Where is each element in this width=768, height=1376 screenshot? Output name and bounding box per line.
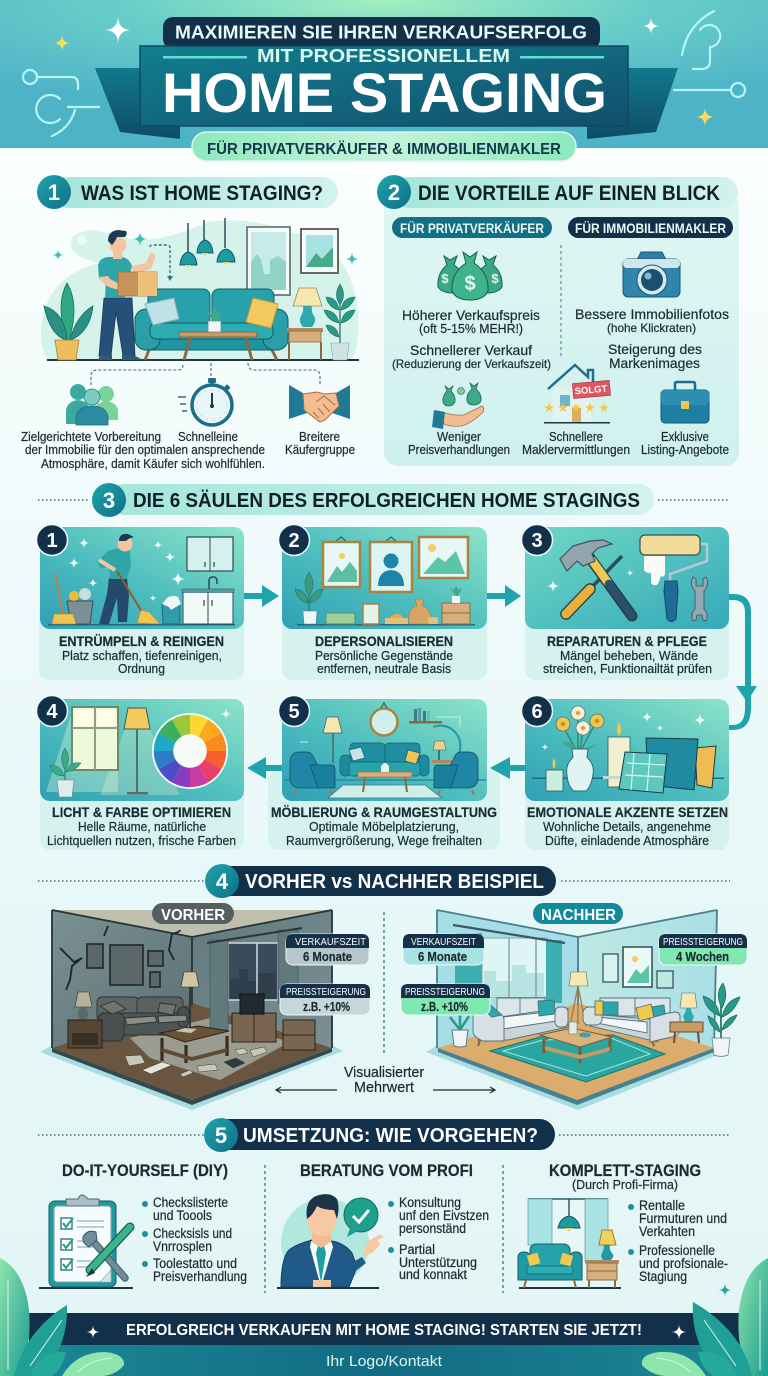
after stat: four weeks: 4 Wochen xyxy=(676,949,729,964)
section 3 heading: DIE 6 SÄULEN DES ERFOLGREICHEN HOME STAGINGS xyxy=(133,489,640,512)
list: Toolestatto und xyxy=(153,1256,237,1271)
card 1: declutter and clean xyxy=(36,524,244,680)
before stat: sales time xyxy=(286,934,369,965)
list: Vnrrosplen xyxy=(153,1239,212,1254)
list: Konsultung xyxy=(399,1195,461,1210)
caption: Platz schaffen, tiefenreinigen, xyxy=(62,648,222,663)
illustration: living room with person xyxy=(41,218,359,361)
text: agent benefits: (hohe Klickraten) xyxy=(607,321,696,335)
left armchair xyxy=(290,752,335,795)
tag: private sellers: FÜR PRIVATVERKÄUFER xyxy=(400,221,544,236)
after stat: price increase: PREISSTEIGERUNG xyxy=(405,986,485,998)
coffee table xyxy=(179,305,257,360)
section 5 heading: 5 xyxy=(215,1123,227,1148)
panel: benefits xyxy=(377,175,739,466)
section 4 heading: VORHER vs NACHHER BEISPIEL xyxy=(245,871,544,893)
icon: sold house with stars: ★ xyxy=(598,400,610,415)
column: consulting xyxy=(277,1161,489,1289)
column: DIY: DO-IT-YOURSELF (DIY) xyxy=(62,1161,228,1180)
list: und profsionale- xyxy=(639,1256,728,1271)
icon: sold house with stars: SOLGT xyxy=(574,384,608,397)
text: what is home staging: Schnelleine xyxy=(178,429,238,444)
caption: Düfte, einladende Atmosphäre xyxy=(545,833,709,848)
footer call to action: ERFOLGREICH VERKAUFEN MIT HOME STAGING! STARTEN SIE JETZT! xyxy=(126,1322,642,1339)
right armchair xyxy=(434,752,478,795)
plant xyxy=(50,748,81,797)
sofa xyxy=(135,289,288,360)
text: private seller benefits xyxy=(392,307,551,371)
cracks xyxy=(60,926,180,990)
section 4 heading xyxy=(38,864,730,898)
before stat: sales time: 6 Monate xyxy=(303,949,352,964)
pendant lamps xyxy=(180,218,235,268)
number badge xyxy=(278,696,310,726)
tag: nachher: NACHHER xyxy=(541,907,616,924)
list xyxy=(399,1195,489,1282)
plant and pot xyxy=(295,572,323,624)
room: after xyxy=(426,910,740,1110)
text: bottom benefit labels: Listing-Angebote xyxy=(641,442,729,457)
section 3 heading xyxy=(38,483,730,517)
section 5 heading xyxy=(38,1118,730,1152)
tv cabinet xyxy=(232,994,315,1050)
footer contact: Ihr Logo/Kontakt xyxy=(326,1353,443,1370)
card 5: furnishing and room design xyxy=(268,696,500,850)
window and curtains xyxy=(453,925,565,1010)
dark window and curtains xyxy=(207,928,302,1030)
caption: Persönliche Gegenstände xyxy=(315,648,453,663)
header band xyxy=(0,0,768,148)
caption xyxy=(543,633,712,676)
title line 2: MIT PROFESSIONELLEM xyxy=(257,46,510,66)
bin with cloth xyxy=(162,604,180,624)
arrow left xyxy=(276,1087,337,1093)
text: bottom benefit labels: Schnellere xyxy=(549,429,603,444)
text: agent benefits xyxy=(575,306,729,371)
caption: Lichtquellen nutzen, frische Farben xyxy=(47,833,236,848)
caption: LICHT & FARBE OPTIMIEREN xyxy=(52,804,231,820)
tag: agents: FÜR IMMOBILIENMAKLER xyxy=(575,221,726,236)
number badge xyxy=(278,524,310,556)
left potted plant xyxy=(450,1013,469,1047)
added value label xyxy=(344,1065,424,1096)
icon: target buyers people xyxy=(66,384,118,425)
worn sofa xyxy=(97,997,189,1041)
text: private seller benefits: Schnellerer Verkauf xyxy=(410,342,532,358)
before stat: sales time: VERKAUFSZEIT xyxy=(295,936,367,948)
text: agent benefits: Steigerung des xyxy=(608,341,702,357)
section 3 heading: 3 xyxy=(103,488,115,513)
list: und Toools xyxy=(153,1208,212,1223)
caption: MÖBLIERUNG & RAUMGESTALTUNG xyxy=(271,804,497,820)
column: consulting: BERATUNG VOM PROFI xyxy=(300,1161,473,1180)
room: before xyxy=(40,910,343,1110)
right leaves xyxy=(642,1258,768,1376)
screwdriver xyxy=(566,556,622,614)
caption xyxy=(59,633,224,676)
column: full staging xyxy=(518,1161,728,1289)
coffee table xyxy=(160,1026,229,1063)
caption xyxy=(271,804,497,848)
caption: REPARATUREN & PFLEGE xyxy=(547,633,707,649)
text: what is home staging: der Immobilie für den optimalen ansprechende xyxy=(25,442,265,457)
icon: hand with money xyxy=(432,383,484,429)
tag: vorher: VORHER xyxy=(161,907,225,924)
wall cabinet xyxy=(187,537,233,571)
list: Furmuturen und xyxy=(639,1211,727,1226)
after stat: sales time: 6 Monate xyxy=(418,949,467,964)
caption: DEPERSONALISIEREN xyxy=(315,633,453,649)
person holding box xyxy=(98,230,157,360)
list: Checkslisterte xyxy=(153,1195,228,1210)
number badge: 6 xyxy=(531,701,543,723)
flowers xyxy=(556,706,604,750)
caption: Ordnung xyxy=(118,661,165,676)
paint roller xyxy=(640,535,707,622)
number badge: 2 xyxy=(288,530,300,552)
footer banner xyxy=(0,1258,768,1376)
wrench xyxy=(691,577,708,621)
icon: consultant xyxy=(277,1194,384,1289)
section 2 heading xyxy=(377,175,738,209)
section 4 heading: 4 xyxy=(216,869,229,894)
caption: Helle Räume, natürliche xyxy=(78,819,206,834)
text: what is home staging: Zielgerichtete Vorbereitung xyxy=(21,429,161,444)
plant left xyxy=(44,283,93,360)
number badge: 1 xyxy=(46,530,58,552)
bucket and broom xyxy=(52,574,93,624)
column: full staging: (Durch Profi-Firma) xyxy=(572,1177,678,1192)
list: Preisverhandlung xyxy=(153,1269,247,1284)
number badge xyxy=(36,524,68,556)
list: Partial xyxy=(399,1242,435,1257)
caption xyxy=(527,804,728,848)
after stat: four weeks: PREISSTEIGERUNG xyxy=(663,936,743,948)
caption: entfernen, neutrale Basis xyxy=(317,661,451,676)
before stat: price increase: z.B. +10% xyxy=(303,999,350,1014)
arrow right xyxy=(433,1087,495,1093)
side table with lamp xyxy=(670,993,703,1043)
text: bottom benefit labels: Exklusive xyxy=(661,429,709,444)
card 4: light and colour xyxy=(36,696,244,850)
caption: ENTRÜMPELN & REINIGEN xyxy=(59,633,224,649)
icon: money bags: $ xyxy=(441,271,449,286)
after stat: four weeks xyxy=(659,934,747,965)
tag: private sellers xyxy=(392,217,552,238)
number badge xyxy=(36,696,68,726)
list xyxy=(153,1195,247,1284)
caption: Wohnliche Details, angenehme xyxy=(543,819,711,834)
section 1 heading: 1 xyxy=(48,180,60,205)
column: full staging: KOMPLETT-STAGING xyxy=(549,1161,701,1180)
section 2 heading: DIE VORTEILE AUF EINEN BLICK xyxy=(418,182,720,205)
hammer xyxy=(560,540,632,616)
icon: money bags: $ xyxy=(491,271,499,286)
subtitle pill: FÜR PRIVATVERKÄUFER & IMMOBILIENMAKLER xyxy=(207,141,561,158)
icon: camera xyxy=(623,252,680,297)
after stat: sales time xyxy=(403,934,484,965)
icon: briefcase xyxy=(661,382,709,423)
before stat: price increase xyxy=(280,984,370,1015)
large plant xyxy=(703,983,740,1056)
wall pictures xyxy=(603,947,673,988)
text: bottom benefit labels xyxy=(408,429,729,457)
list xyxy=(639,1198,728,1284)
icon: stopwatch xyxy=(178,378,232,425)
list: Checksisls und xyxy=(153,1226,232,1241)
pillows xyxy=(619,738,716,793)
colour wheel xyxy=(154,715,226,787)
caption: Optimale Möbelplatzierung, xyxy=(309,819,459,834)
floor lamp xyxy=(181,972,199,1033)
window xyxy=(247,227,290,295)
left leaves xyxy=(0,1258,124,1376)
icon: clipboard and tools xyxy=(39,1195,133,1289)
subtitle pill xyxy=(192,132,576,161)
sofa xyxy=(340,743,429,776)
card 3: repairs and care xyxy=(522,524,729,680)
icon: sold house with stars: ★ xyxy=(570,400,582,415)
icon: sold house with stars: ★ xyxy=(543,400,555,415)
caption xyxy=(47,804,236,848)
plant right xyxy=(324,284,355,360)
after stat: sales time: VERKAUFSZEIT xyxy=(411,936,476,948)
title line 1: MAXIMIEREN SIE IHREN VERKAUFSERFOLG xyxy=(175,22,587,42)
icon: sold house with stars xyxy=(543,365,611,424)
table lamp and side table xyxy=(287,288,323,360)
wall frames xyxy=(87,944,163,987)
text: what is home staging: Breitere xyxy=(299,429,340,444)
wall picture xyxy=(301,229,338,273)
card 2: depersonalize xyxy=(278,524,487,680)
caption: streichen, Funktionailtät prüfen xyxy=(543,661,712,676)
floor lamp xyxy=(569,972,588,1026)
debris xyxy=(125,1047,267,1077)
number badge: 4 xyxy=(46,701,58,723)
floor line xyxy=(47,359,359,361)
text: private seller benefits: (oft 5-15% MEHR!) xyxy=(419,322,523,336)
column: DIY xyxy=(39,1161,247,1289)
text: bottom benefit labels: Weniger xyxy=(437,429,482,444)
text: agent benefits: Markenimages xyxy=(609,355,700,371)
text: bottom benefit labels: Preisverhandlungen xyxy=(408,442,510,457)
list: unf den Eivstzen xyxy=(399,1208,489,1223)
title main: HOME STAGING xyxy=(162,61,607,124)
text: private seller benefits: (Reduzierung der Verkaufszeit) xyxy=(392,357,551,371)
after stat: price increase xyxy=(401,984,490,1015)
icon: sold house with stars: ★ xyxy=(584,400,596,415)
section 5 heading: UMSETZUNG: WIE VORGEHEN? xyxy=(243,1125,538,1147)
added value label: Mehrwert xyxy=(354,1080,414,1096)
list: Professionelle xyxy=(639,1243,715,1258)
text: agent benefits: Bessere Immobilienfotos xyxy=(575,306,729,322)
after stat: price increase: z.B. +10% xyxy=(421,999,468,1014)
added value label: Visualisierter xyxy=(344,1065,424,1081)
tag: agents xyxy=(568,217,733,238)
icon: sold house with stars: ★ xyxy=(557,400,569,415)
caption: Raumvergrößerung, Wege freihalten xyxy=(286,833,482,848)
right white sofa xyxy=(583,998,680,1046)
left white sofa xyxy=(473,998,568,1046)
coffee table xyxy=(540,1022,612,1063)
bullets xyxy=(142,1201,148,1267)
icon: handshake xyxy=(289,385,350,422)
text: what is home staging xyxy=(21,429,355,471)
number badge: 5 xyxy=(288,701,300,723)
section 1 heading: WAS IST HOME STAGING? xyxy=(81,182,323,205)
dashed arrow xyxy=(150,245,170,278)
vase xyxy=(567,749,593,791)
caption: Mängel beheben, Wände xyxy=(560,648,698,663)
tag: vorher xyxy=(152,903,234,924)
icon: money bags xyxy=(438,252,502,300)
text: what is home staging: Atmosphäre, damit Käufer sich wohlfühlen. xyxy=(41,456,265,471)
bullets xyxy=(628,1204,634,1255)
flow arrows between cards xyxy=(244,585,757,779)
number badge xyxy=(522,524,552,556)
icon: money bags: $ xyxy=(464,273,476,295)
list: Verkahten xyxy=(639,1224,695,1239)
before stat: price increase: PREISSTEIGERUNG xyxy=(286,986,366,998)
coffee table xyxy=(358,763,412,792)
bullets xyxy=(388,1201,394,1253)
section 1 heading xyxy=(37,175,338,209)
number badge xyxy=(522,696,552,726)
person sweeping xyxy=(97,534,160,624)
title ribbon xyxy=(95,17,678,139)
text: what is home staging: Käufergruppe xyxy=(285,442,355,457)
section 2 heading: 2 xyxy=(388,180,400,205)
candles xyxy=(546,722,630,791)
list: und konnakt xyxy=(399,1267,467,1282)
list: Stagiung xyxy=(639,1269,687,1284)
sink cabinet xyxy=(182,577,234,624)
list: personständ xyxy=(399,1221,466,1236)
caption xyxy=(315,633,453,676)
dashed connectors xyxy=(91,363,320,385)
number badge: 3 xyxy=(531,530,543,552)
table lamp and left side table xyxy=(68,992,102,1048)
list: Rentalle xyxy=(639,1198,685,1213)
text: bottom benefit labels: Maklervermittlungen xyxy=(522,442,630,457)
divider before after xyxy=(383,912,385,1053)
caption: EMOTIONALE AKZENTE SETZEN xyxy=(527,804,728,820)
icon: furnished room xyxy=(518,1199,621,1289)
list: Unterstützung xyxy=(399,1255,477,1270)
text: private seller benefits: Höherer Verkaufspreis xyxy=(402,307,540,323)
card 6: emotional accents xyxy=(522,696,729,850)
